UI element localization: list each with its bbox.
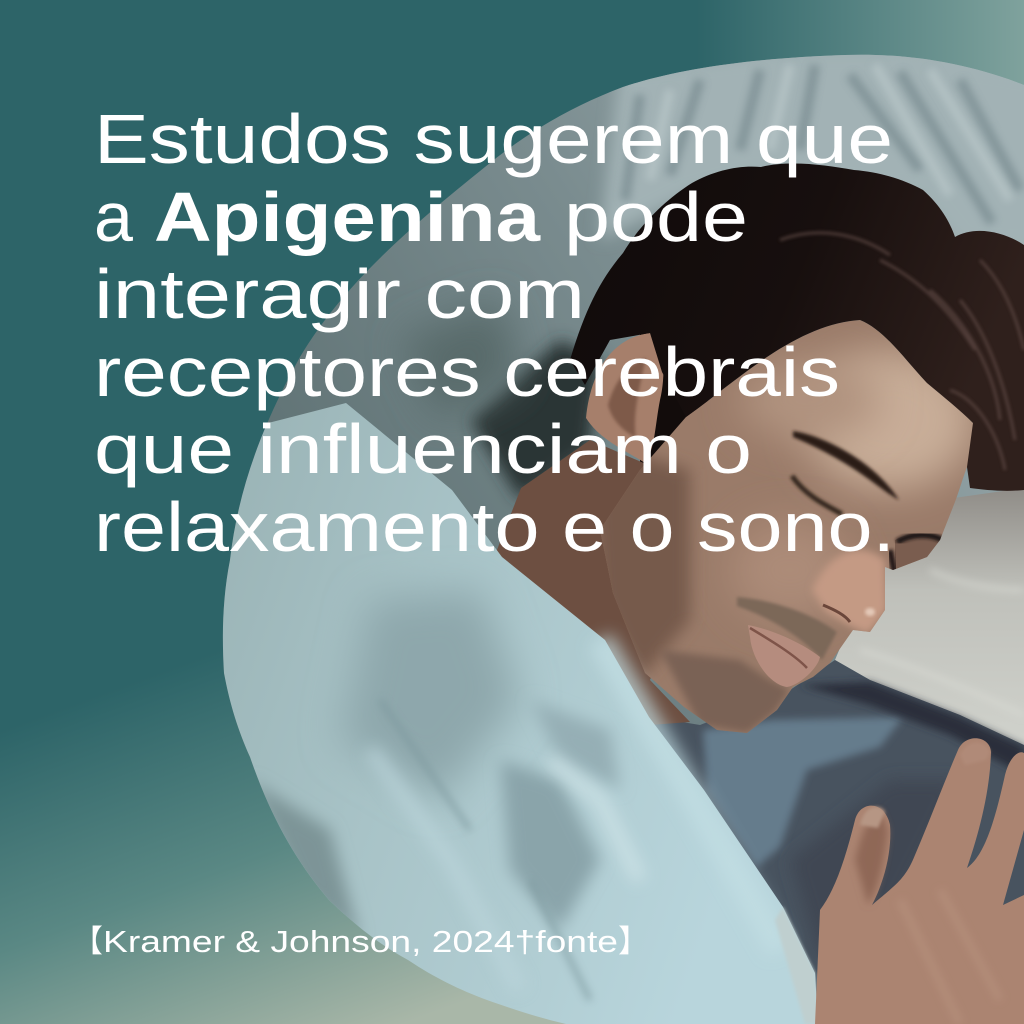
moustache (737, 597, 837, 660)
citation: 】 (618, 924, 649, 959)
headline: receptores cerebrais (94, 333, 840, 411)
sheet edge (775, 907, 818, 1024)
dark pillow (655, 660, 1024, 996)
lips (748, 625, 820, 687)
hand (815, 738, 1024, 1024)
headline: a (94, 178, 152, 256)
nose (812, 550, 887, 634)
citation: Kramer & Johnson, 2024†fonte (103, 924, 618, 959)
headline: que influenciam o (94, 410, 752, 488)
hair behind ear (640, 333, 708, 463)
citation: 【 (72, 924, 103, 959)
face (600, 320, 973, 733)
upper pillow (223, 54, 1024, 725)
pillow seam (932, 570, 1018, 590)
eyebrow (793, 431, 899, 500)
headline: relaxamento e o sono. (94, 488, 895, 566)
beard (660, 650, 790, 733)
headline: interagir com (94, 255, 585, 333)
hair (570, 164, 1024, 491)
headline: Estudos sugerem que (94, 100, 893, 178)
duvet (200, 403, 818, 1024)
ear (586, 333, 663, 463)
headline (94, 100, 895, 566)
headline: Apigenina (154, 178, 541, 256)
closed near eye (792, 476, 842, 514)
neck (495, 440, 700, 725)
lower right pale pillow (835, 488, 1024, 745)
far eye (895, 533, 941, 570)
headline: pode (564, 178, 748, 256)
photo: man sleeping (200, 40, 1024, 1024)
